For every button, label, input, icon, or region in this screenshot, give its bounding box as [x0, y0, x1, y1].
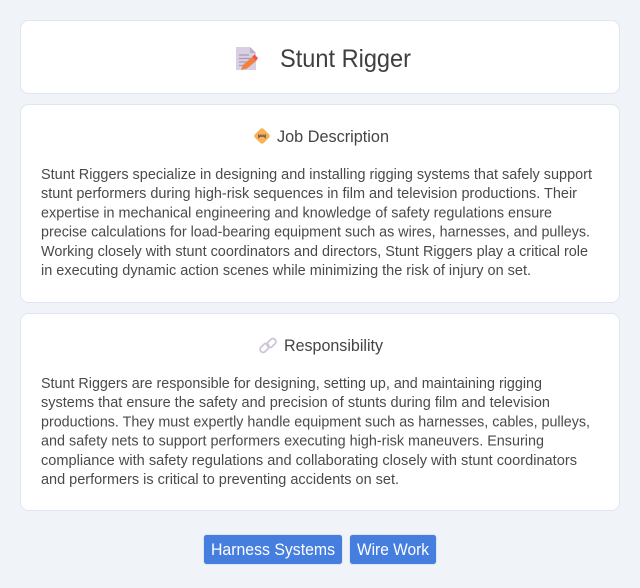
title text: Stunt Rigger: [280, 45, 411, 73]
text block: responsibility: and safety nets to support performers executing high-risk maneuvers. Ensuring: [41, 432, 544, 450]
tag: wire work: Wire Work: [357, 541, 430, 559]
text block: job description: Stunt Riggers specialize in designing and installing rigging systems that safely support: [41, 166, 593, 183]
tag: harness systems: Harness Systems: [211, 541, 335, 559]
tag: wire work: [350, 534, 436, 564]
panel: job description: [20, 104, 620, 302]
text block: job description: expertise in mechanical engineering and knowledge of safety regulations ensure: [41, 204, 552, 222]
text block: responsibility: and performers is critical to preventing accidents on set.: [41, 471, 399, 488]
heading: job description: Job Description: [277, 128, 389, 146]
text block: job description: stunt performers during high-risk sequences in film and television productions. Their: [41, 185, 577, 202]
tag: harness systems: [204, 534, 342, 564]
text block: job description: in executing dynamic action scenes while minimizing the risk of injury on set.: [41, 262, 531, 279]
icon: diamond sign: [253, 127, 271, 145]
text block: responsibility: compliance with safety regulations and collaborating closely with stunt coordinators: [41, 452, 577, 469]
text block: responsibility: Stunt Riggers are responsible for designing, setting up, and maintaining rigging: [41, 375, 542, 392]
text block: job description: [41, 166, 593, 279]
icon: chain link: [259, 337, 277, 354]
text block: responsibility: systems that ensure the safety and precision of stunts during film and television: [41, 394, 550, 411]
panel: responsibility: [20, 314, 620, 510]
heading: responsibility: Responsibility: [284, 337, 384, 355]
text block: job description: Working closely with stunt coordinators and directors, Stunt Riggers play a critical role: [41, 243, 588, 260]
text block: job description: precise calculations for load-bearing equipment such as wires, harnesses, and pulleys.: [41, 224, 590, 240]
icon: document with pencil: [236, 47, 258, 70]
text block: responsibility: [41, 375, 590, 488]
panel: title: [20, 20, 620, 94]
text block: responsibility: productions. They must expertly handle equipment such as harnesses, cables, pulleys,: [41, 414, 590, 430]
